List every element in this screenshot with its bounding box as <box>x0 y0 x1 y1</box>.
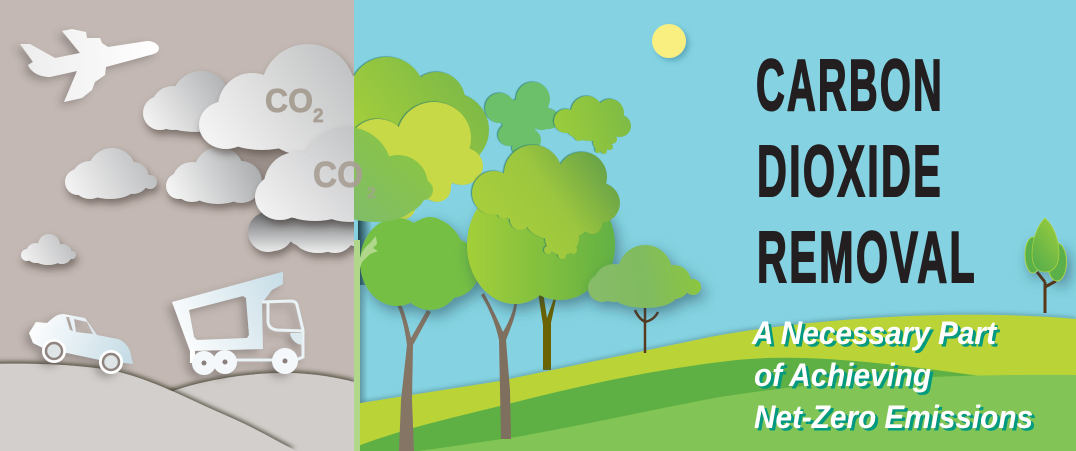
cloud: small cloud behind large CO2 cloud <box>143 71 230 132</box>
shadow: haze behind clouds <box>220 143 304 187</box>
label: CO2: CO <box>265 82 313 119</box>
car rear wheel <box>42 339 66 363</box>
car body <box>29 314 133 364</box>
small tree trunk <box>635 307 658 353</box>
front grey hill <box>0 364 296 451</box>
cloud shape <box>245 212 354 263</box>
car rear hub <box>46 343 62 359</box>
trunk: brown tree center <box>481 293 517 439</box>
subtitle line 3: Net-Zero Emissions <box>754 399 1033 435</box>
strip <box>354 240 360 451</box>
green half shape <box>354 128 433 222</box>
tree 4 main canopy <box>360 217 480 310</box>
sun <box>652 24 686 58</box>
panel: clean blue sky <box>354 0 1076 451</box>
subtitle line 2: of Achieving <box>754 357 931 393</box>
cloud: split CO2 cloud, green half <box>354 128 433 222</box>
truck hub middle <box>222 360 228 364</box>
title <box>756 46 977 298</box>
tree 5 top cloud canopy <box>472 145 620 259</box>
tree 3 small cloud canopy <box>554 96 631 154</box>
subtitle line 1: A Necessary Part <box>751 315 997 351</box>
truck cab outline <box>228 301 303 360</box>
tree 6 cloud canopy <box>588 245 701 308</box>
truck chassis <box>190 349 195 363</box>
cloud: mid-center cloud <box>166 147 262 204</box>
truck front fender <box>290 333 302 345</box>
airplane wings and body <box>20 29 159 102</box>
tree 2 flower canopy <box>485 82 559 156</box>
truck hub rear <box>202 360 206 366</box>
cloud: mid-left cloud <box>65 148 157 199</box>
tree 1 back canopy <box>354 56 489 155</box>
shadow at divider lower <box>360 285 367 403</box>
back grey hill <box>150 373 354 451</box>
label: subscript 2 on split cloud: 2 <box>367 185 376 202</box>
large cloud shape <box>199 44 380 156</box>
truck front wheel <box>272 348 298 374</box>
cloud: small far-left cloud <box>21 234 76 265</box>
hill: light green <box>418 375 1076 451</box>
trunk: brown tree left <box>396 300 431 451</box>
title line 2: DIOXIDE <box>757 132 943 212</box>
right tree side leaves <box>1025 237 1066 281</box>
label: subscript 2: 2 <box>313 106 324 127</box>
cloud: dark low cloud <box>245 212 354 263</box>
grey half shape <box>252 126 354 232</box>
panel: green landscape <box>347 24 1076 451</box>
tree 1 yellow canopy <box>347 102 483 220</box>
tree 5 main canopy <box>467 186 615 304</box>
truck bed <box>172 272 283 351</box>
car front wheel <box>99 350 123 374</box>
car front hub <box>103 354 119 370</box>
right tree trunk <box>1037 272 1056 313</box>
trunk: olive tree <box>538 292 556 370</box>
panel: polluted grey background <box>0 0 354 451</box>
hill: yellow-green <box>354 315 1076 451</box>
cloud: large CO2 cloud <box>199 44 380 156</box>
icon: dump truck <box>172 272 303 375</box>
stem: green plant strip along divider <box>354 236 378 451</box>
label: CO2 on split cloud: CO <box>313 154 363 195</box>
stem branch with leaves <box>359 236 378 268</box>
icon: car <box>29 314 133 374</box>
icon: airplane <box>20 29 159 102</box>
truck middle wheel <box>213 350 237 374</box>
truck rear wheel <box>192 351 216 375</box>
subtitle <box>751 315 1033 435</box>
right tree centre leaf <box>1032 218 1059 272</box>
hill: dark green <box>358 358 1040 451</box>
shadow at divider upper <box>358 220 371 285</box>
cloud: split CO2 cloud, grey half <box>252 126 354 232</box>
truck hub front <box>282 358 288 364</box>
panel: grey hills <box>0 364 354 451</box>
